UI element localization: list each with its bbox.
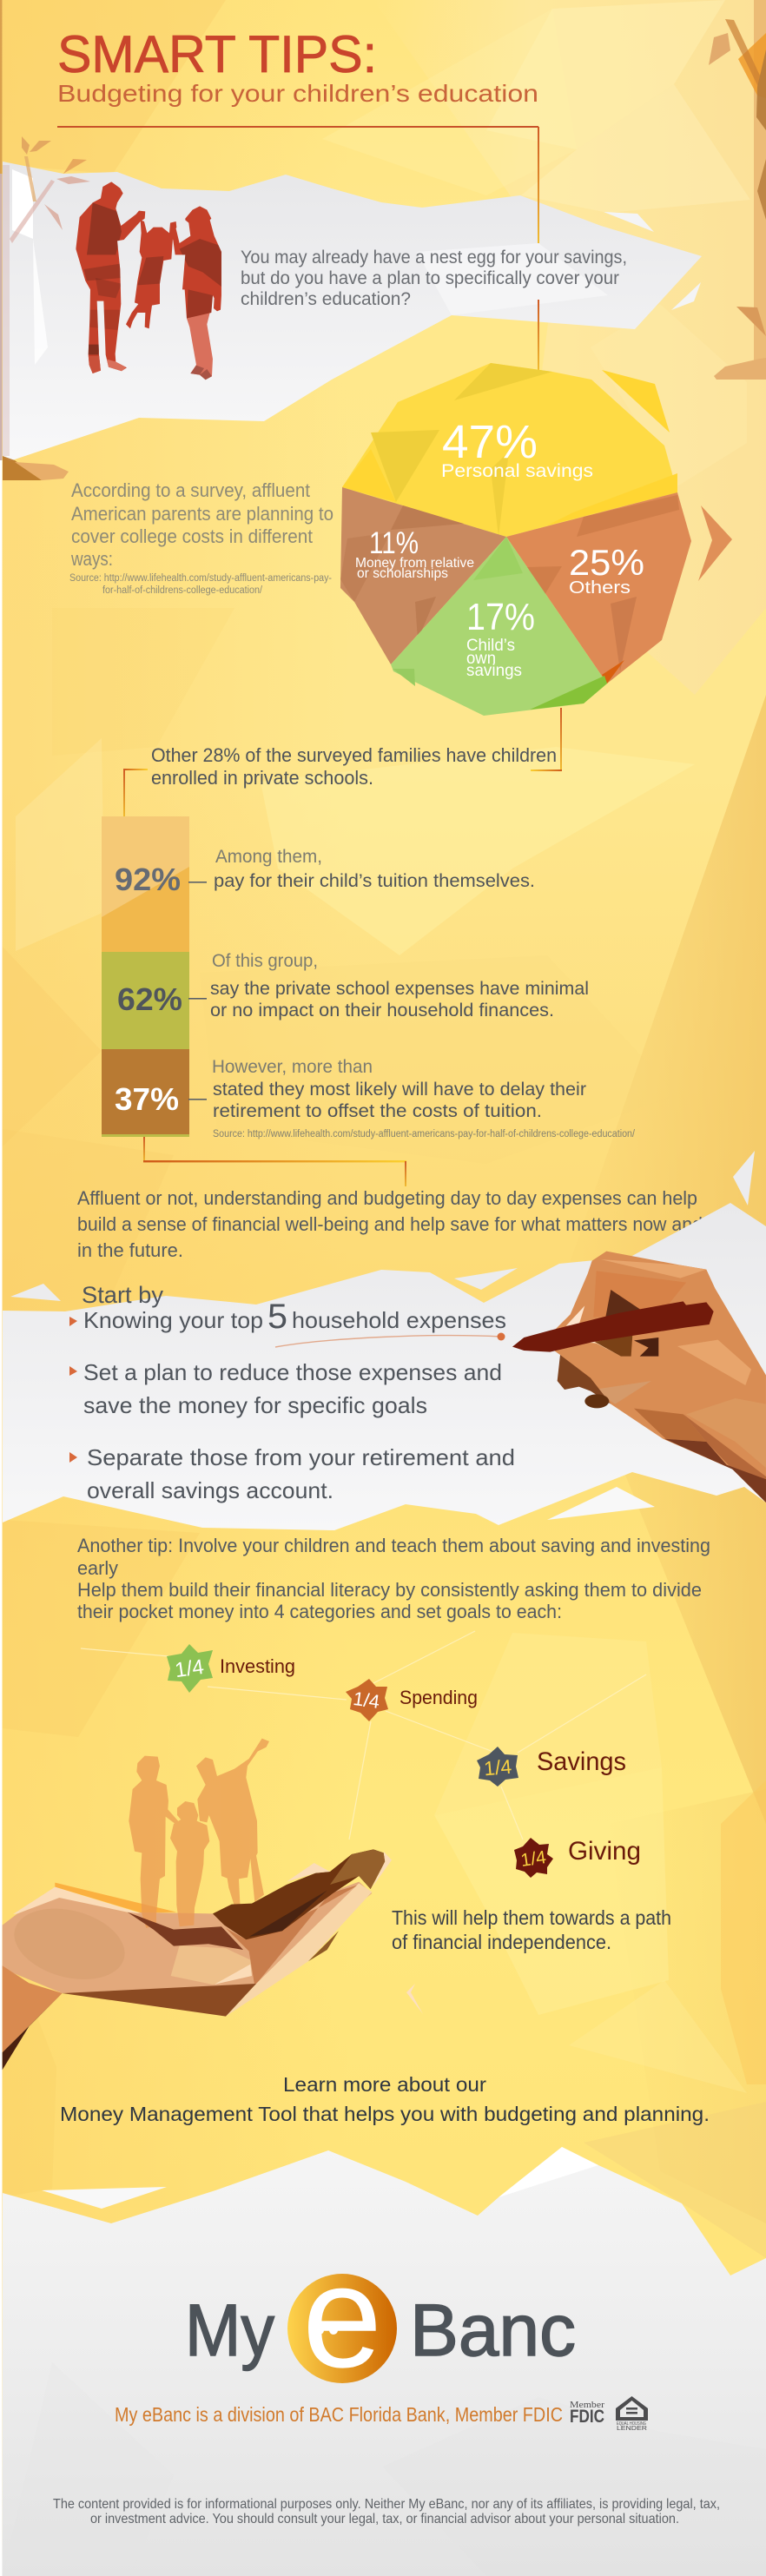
category: giving [514,1837,641,1878]
source: for-half-of-childrens-college-education/ [102,585,263,596]
category: giving: Giving [568,1837,641,1866]
text: private schools lead: Other 28% of the surveyed families have children [151,744,557,766]
palm [3,1882,372,1993]
text: another tip [77,1535,710,1622]
tip 3: overall savings account. [87,1477,333,1503]
text: survey intro [69,479,333,596]
slice: child's own savings 17%: savings [466,662,522,680]
text: financial independence: of financial independence. [392,1931,611,1953]
tip 2 [69,1359,502,1418]
stacked bar chart: tuition figures [102,816,189,1137]
dashes: bar to text [188,882,207,1100]
text: introduction question: but do you have a plan to specifically cover your [241,268,619,288]
fingers [213,1849,385,1939]
panel: white low-poly footer [2,2147,766,2576]
pie chart: college funding sources [340,363,732,716]
text: introduction question: You may already have a nest egg for your savings, [241,248,627,268]
tip 3 [69,1444,515,1503]
segment: 92% [102,816,189,952]
tip 1: 5 [267,1298,287,1336]
text: affluent or not: in the future. [77,1239,183,1261]
text: another tip: Help them build their financial literacy by consistently asking them to divide [77,1579,702,1601]
panel: white low-poly band 1 [3,162,702,461]
text: introduction question [241,248,627,309]
tip 3: Separate those from your retirement and [87,1444,515,1470]
text: financial independence [392,1906,671,1953]
category: giving: 1/4 [519,1847,548,1871]
text: 62% description: or no impact on their household finances. [210,1001,554,1020]
tip 1 [69,1298,506,1336]
logo: My eBanc [185,2235,576,2398]
logo mark: e [302,2235,382,2398]
slice: others 25% [506,492,691,684]
title: SMART TIPS: [57,25,377,83]
logo: My eBanc: My [185,2289,274,2371]
text: affluent or not: Affluent or not, understanding and budgeting day to day expenses can help [77,1187,697,1209]
category: investing: Investing [220,1655,295,1677]
text: another tip: early [77,1557,118,1579]
badge: FDIC: FDIC [570,2407,604,2427]
slice: child's own savings 17% [391,537,607,716]
text: affluent or not [77,1187,703,1261]
light edges [13,1887,142,1914]
text: disclaimer [53,2497,720,2526]
category: spending [346,1679,478,1721]
slice: money from relative 11%: 11% [369,526,419,560]
illustration: family of three in red silhouette [72,180,226,380]
category: spending: 1/4 [352,1688,381,1713]
arrow: orange chevron [698,505,732,581]
shard: yellow [602,370,670,433]
text: another tip: their pocket money into 4 categories and set goals to each: [77,1601,562,1622]
category: investing: 1/4 [174,1655,205,1682]
hand underside [63,1984,256,2017]
segment: 37% [102,1049,189,1137]
text: 62% description: say the private school expenses have minimal [210,979,589,999]
connector: pie chart to private schools [123,708,562,816]
pen [512,1301,714,1352]
mother legs [187,313,213,380]
source: Source: http://www.lifehealth.com/study-affluent-americans-pay-for-half-of-childrens-college-education/ [213,1129,636,1139]
text: survey intro: ways: [70,548,113,570]
text: 37% description: stated they most likely will have to delay their [213,1080,586,1100]
text: another tip: Another tip: Involve your children and teach them about saving and investing [77,1535,710,1556]
illustration: top-left autumn tree [0,0,90,480]
slice: money from relative 11% [340,487,506,664]
category: savings: Savings [537,1747,626,1776]
slice: child's own savings 17%: own [466,650,496,668]
title [57,25,538,107]
pen underline stroke [275,1332,505,1347]
text: financial independence: This will help them towards a path [392,1906,671,1929]
subtitle: Budgeting for your children’s education [57,80,538,107]
text: 92% description: Among them, [215,847,322,867]
slice: child's own savings 17%: Child’s [466,637,515,655]
logo: My eBanc: Banc [410,2289,576,2371]
constellation lines [81,1631,646,1840]
illustration: top-right autumn tree [709,0,766,380]
illustration: hand holding a pen [512,1252,766,1503]
text: learn more call to action: Money Management Tool that helps you with budgeting and planning. [60,2103,710,2125]
slice: money from relative 11%: Money from relative [355,556,474,571]
segment: 37%: 37% [115,1081,179,1117]
text: learn more call to action [60,2073,710,2125]
text: 37% description [212,1057,636,1139]
category: savings: 1/4 [483,1755,512,1780]
text: 92% description: pay for their child’s tuition themselves. [214,871,535,891]
badge: FDIC [570,2400,604,2427]
tip 1: household expenses [292,1307,506,1333]
wrist [3,1965,63,2052]
text: private schools lead: enrolled in private schools. [151,767,373,789]
text: 37% description: retirement to offset the costs of tuition. [213,1101,542,1121]
family silhouettes [129,1739,269,1928]
badge: equal housing lender: LENDER [617,2426,647,2432]
slice: personal savings 47%: 47% [442,416,538,468]
heading: start by: Start by [82,1282,163,1308]
orange shard [55,1883,176,1913]
connector: bar to budgeting text [143,1137,406,1186]
tip 2: save the money for specific goals [83,1392,427,1418]
crease [128,1912,243,1950]
connector: title to pie chart [57,126,539,371]
text: survey intro: American parents are planning to [71,503,333,525]
slice: others 25%: Others [569,578,631,598]
badge: equal housing lender: EQUAL HOUSING [617,2421,646,2427]
slice: money from relative 11%: or scholarships [357,566,448,581]
text: 92% description [214,847,535,891]
badge: FDIC: Member [570,2400,604,2410]
segment: 92%: 92% [115,862,181,897]
slice: child's own savings 17%: 17% [466,596,535,638]
tip 1: Knowing your top [83,1307,263,1333]
text: survey intro: cover college costs in different [71,525,313,547]
segment: 62% [102,952,189,1049]
slice: personal savings 47% [342,363,677,537]
text: affluent or not: build a sense of financial well-being and help save for what matters now and [77,1213,703,1235]
category: spending: Spending [400,1687,478,1708]
category: savings [477,1747,626,1787]
text: survey intro: According to a survey, affluent [71,479,310,501]
mother [173,207,221,318]
text: disclaimer: or investment advice. You should consult your legal, tax, or financial advisor about your personal situation. [90,2512,679,2526]
source: Source: http://www.lifehealth.com/study-affluent-americans-pay- [69,573,332,584]
father [72,180,148,376]
text: division statement: My eBanc is a division of BAC Florida Bank, Member FDIC [115,2403,563,2426]
child [126,220,176,328]
text: learn more call to action: Learn more about our [283,2073,486,2096]
shard: pale [406,1984,423,2014]
illustration: open hand with family [3,1739,392,2070]
slice: personal savings 47%: Personal savings [441,461,593,481]
slice: others 25%: 25% [569,542,644,583]
source [69,573,332,596]
text: 62% description [210,951,589,1020]
panel: white low-poly band 2 [3,1151,766,1530]
text: 37% description: However, more than [212,1057,373,1077]
badge: equal housing lender [616,2396,648,2432]
category: investing [167,1644,295,1693]
text: introduction question: children’s education? [241,289,411,309]
list: expense tips [69,1282,515,1503]
text: 62% description: Of this group, [212,951,318,971]
tip 2: Set a plan to reduce those expenses and [83,1359,502,1385]
segment: 62%: 62% [117,981,182,1017]
text: private schools lead [151,744,557,789]
